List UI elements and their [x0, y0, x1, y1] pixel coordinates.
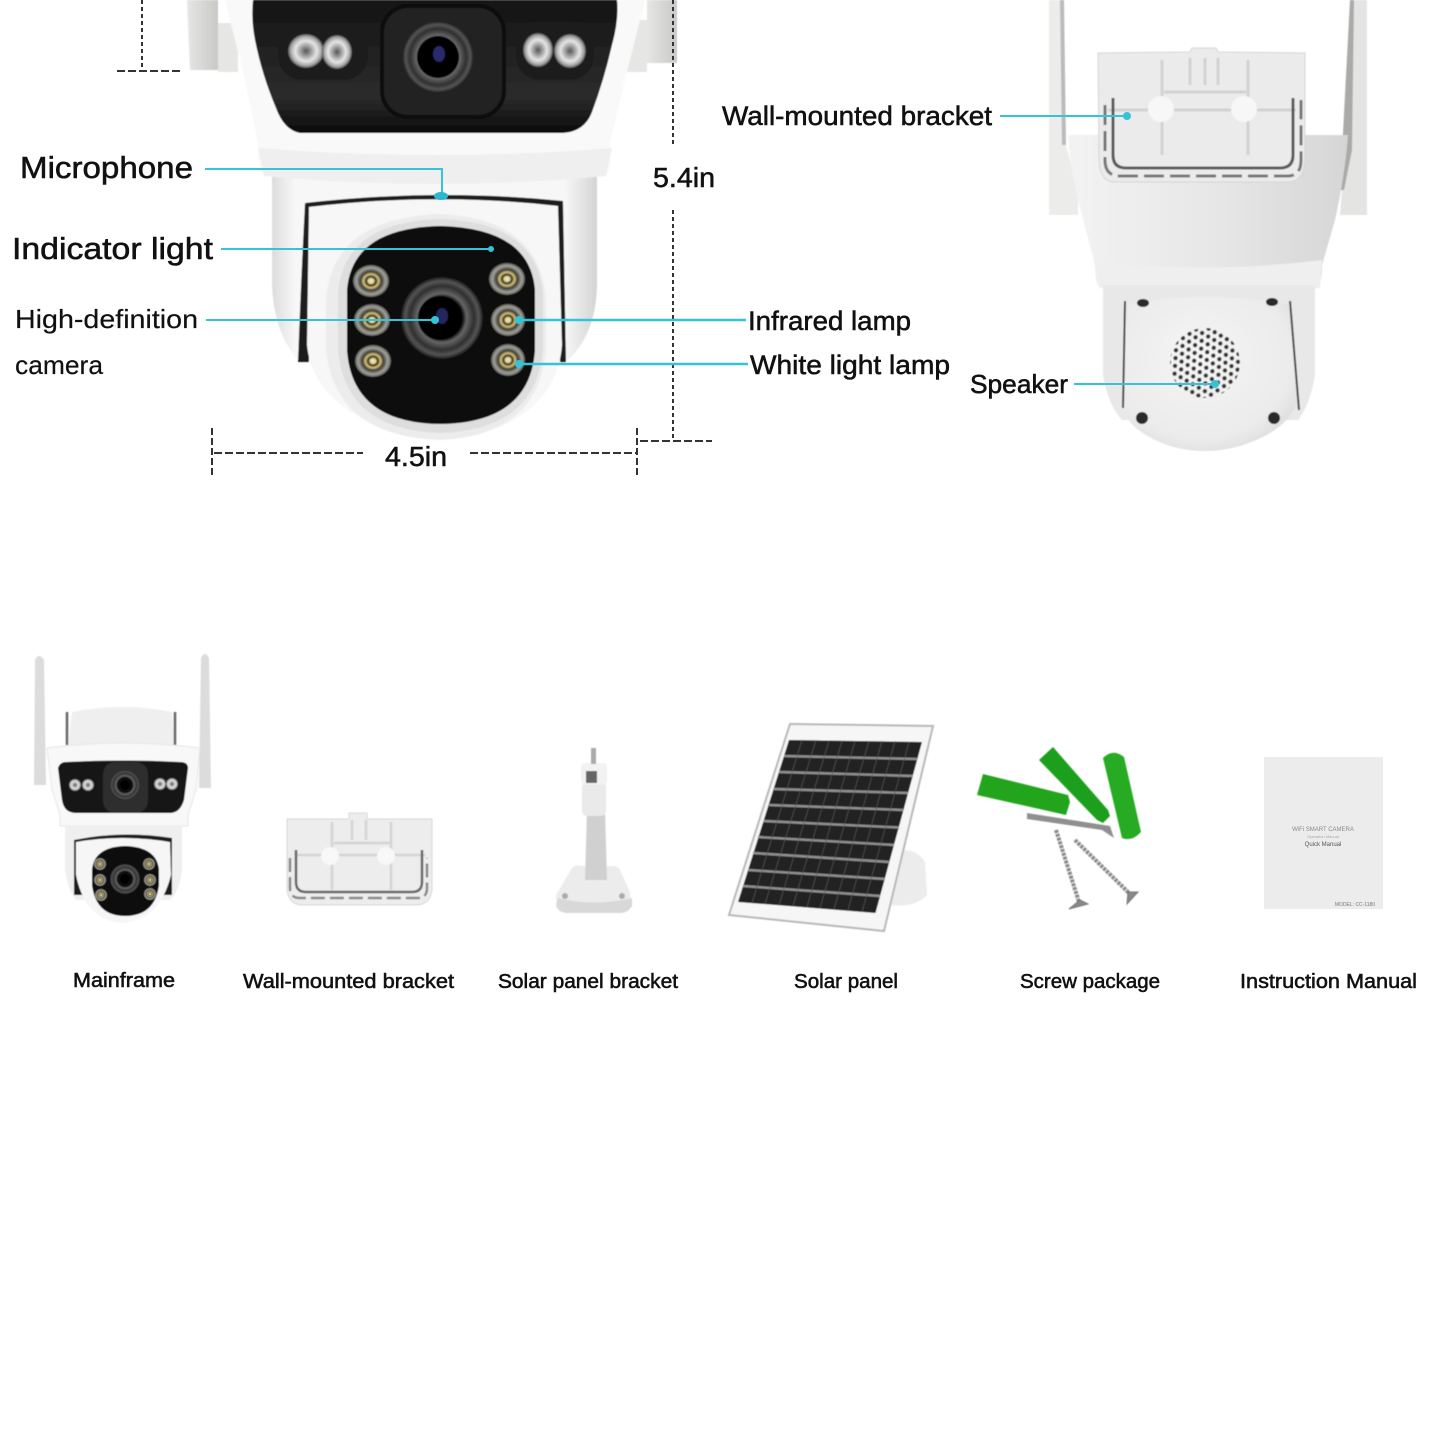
- callout: high-definition camera: [15, 304, 439, 380]
- right infrared lamps: [516, 22, 594, 80]
- rear wall bracket: [1098, 48, 1305, 182]
- icon: solar panel: [729, 724, 933, 931]
- callout: white light lamp: White light lamp: [750, 350, 950, 380]
- rear camera illustration: [1049, 0, 1367, 451]
- rear upper body: [1068, 135, 1348, 294]
- front camera illustration: [187, 0, 677, 440]
- label: height: 5.4in: [653, 162, 715, 193]
- icon: stand: [556, 748, 632, 913]
- label: solar panel bracket: Solar panel bracket: [498, 971, 678, 993]
- callout: high-definition camera: camera: [15, 350, 104, 380]
- top camera lens: [402, 21, 474, 93]
- callout: indicator light: Indicator light: [12, 231, 213, 266]
- callout: infrared lamp: Infrared lamp: [748, 306, 911, 336]
- callout: speaker: Speaker: [970, 369, 1068, 399]
- icon: manual booklet: Quick Manual: [1305, 842, 1341, 848]
- icon: speaker grille: [1170, 328, 1240, 398]
- package item: wall-mounted bracket: [243, 813, 454, 993]
- dome groove lines: [1123, 301, 1299, 410]
- dome rim shading: [326, 214, 546, 440]
- rotating dome: [307, 199, 562, 438]
- dome screws: [1136, 298, 1280, 424]
- icon: screws and wall plugs: [977, 747, 1141, 909]
- label: mainframe: Mainframe: [73, 970, 175, 992]
- package item: mainframe: [34, 654, 211, 992]
- icon: mainframe camera: [34, 654, 211, 923]
- callout: wall-mounted bracket: [722, 101, 1131, 131]
- label: solar panel: Solar panel: [794, 971, 898, 993]
- lower camera lens: [401, 277, 483, 359]
- callout: high-definition camera: High-definition: [15, 304, 198, 334]
- LED lamps left: [353, 265, 391, 377]
- callout: wall-mounted bracket: Wall-mounted bracket: [722, 101, 993, 131]
- label: screw package: Screw package: [1020, 971, 1160, 993]
- callout: microphone: Microphone: [20, 150, 193, 185]
- callout: white light lamp: [515, 350, 950, 380]
- icon: right antenna mount: [625, 0, 677, 72]
- package item: instruction manual: [1240, 757, 1417, 993]
- icon: rear antennas: [1049, 0, 1367, 215]
- icon: manual booklet: WiFi SMART CAMERA: [1292, 827, 1354, 833]
- upper camera body: [225, 0, 645, 184]
- rear collar band: [1094, 260, 1322, 294]
- lower arm housing: [272, 170, 597, 362]
- icon: manual booklet: [1264, 757, 1383, 909]
- package item: solar panel bracket: [498, 748, 678, 993]
- package item: screw package: [977, 747, 1160, 993]
- left infrared lamps: [278, 24, 368, 80]
- label: wall-mounted bracket: Wall-mounted bracket: [243, 971, 454, 993]
- LED lamps right: [489, 263, 525, 376]
- collar shading: [258, 148, 612, 184]
- callout: microphone: [20, 150, 448, 200]
- icon: bracket: [287, 813, 432, 905]
- label: instruction manual: Instruction Manual: [1240, 971, 1417, 993]
- rear dome: [1122, 297, 1296, 451]
- lens housing: [382, 6, 504, 117]
- dark sensor panel: [252, 0, 617, 133]
- black lower face: [347, 226, 535, 424]
- callout: infrared lamp: [515, 306, 911, 336]
- callout: speaker: [970, 369, 1219, 399]
- icon: manual booklet: Operation Manual: [1307, 834, 1339, 839]
- icon: left antenna mount: [187, 0, 238, 72]
- dimension lines: height and width: [117, 0, 712, 478]
- label: width: 4.5in: [385, 441, 447, 472]
- package item: solar panel: [729, 724, 933, 993]
- head groove: [298, 195, 566, 362]
- icon: manual booklet: MODEL: CC-1180: [1335, 902, 1375, 908]
- rear lower housing: [1103, 285, 1315, 420]
- callout: indicator light: [12, 231, 494, 266]
